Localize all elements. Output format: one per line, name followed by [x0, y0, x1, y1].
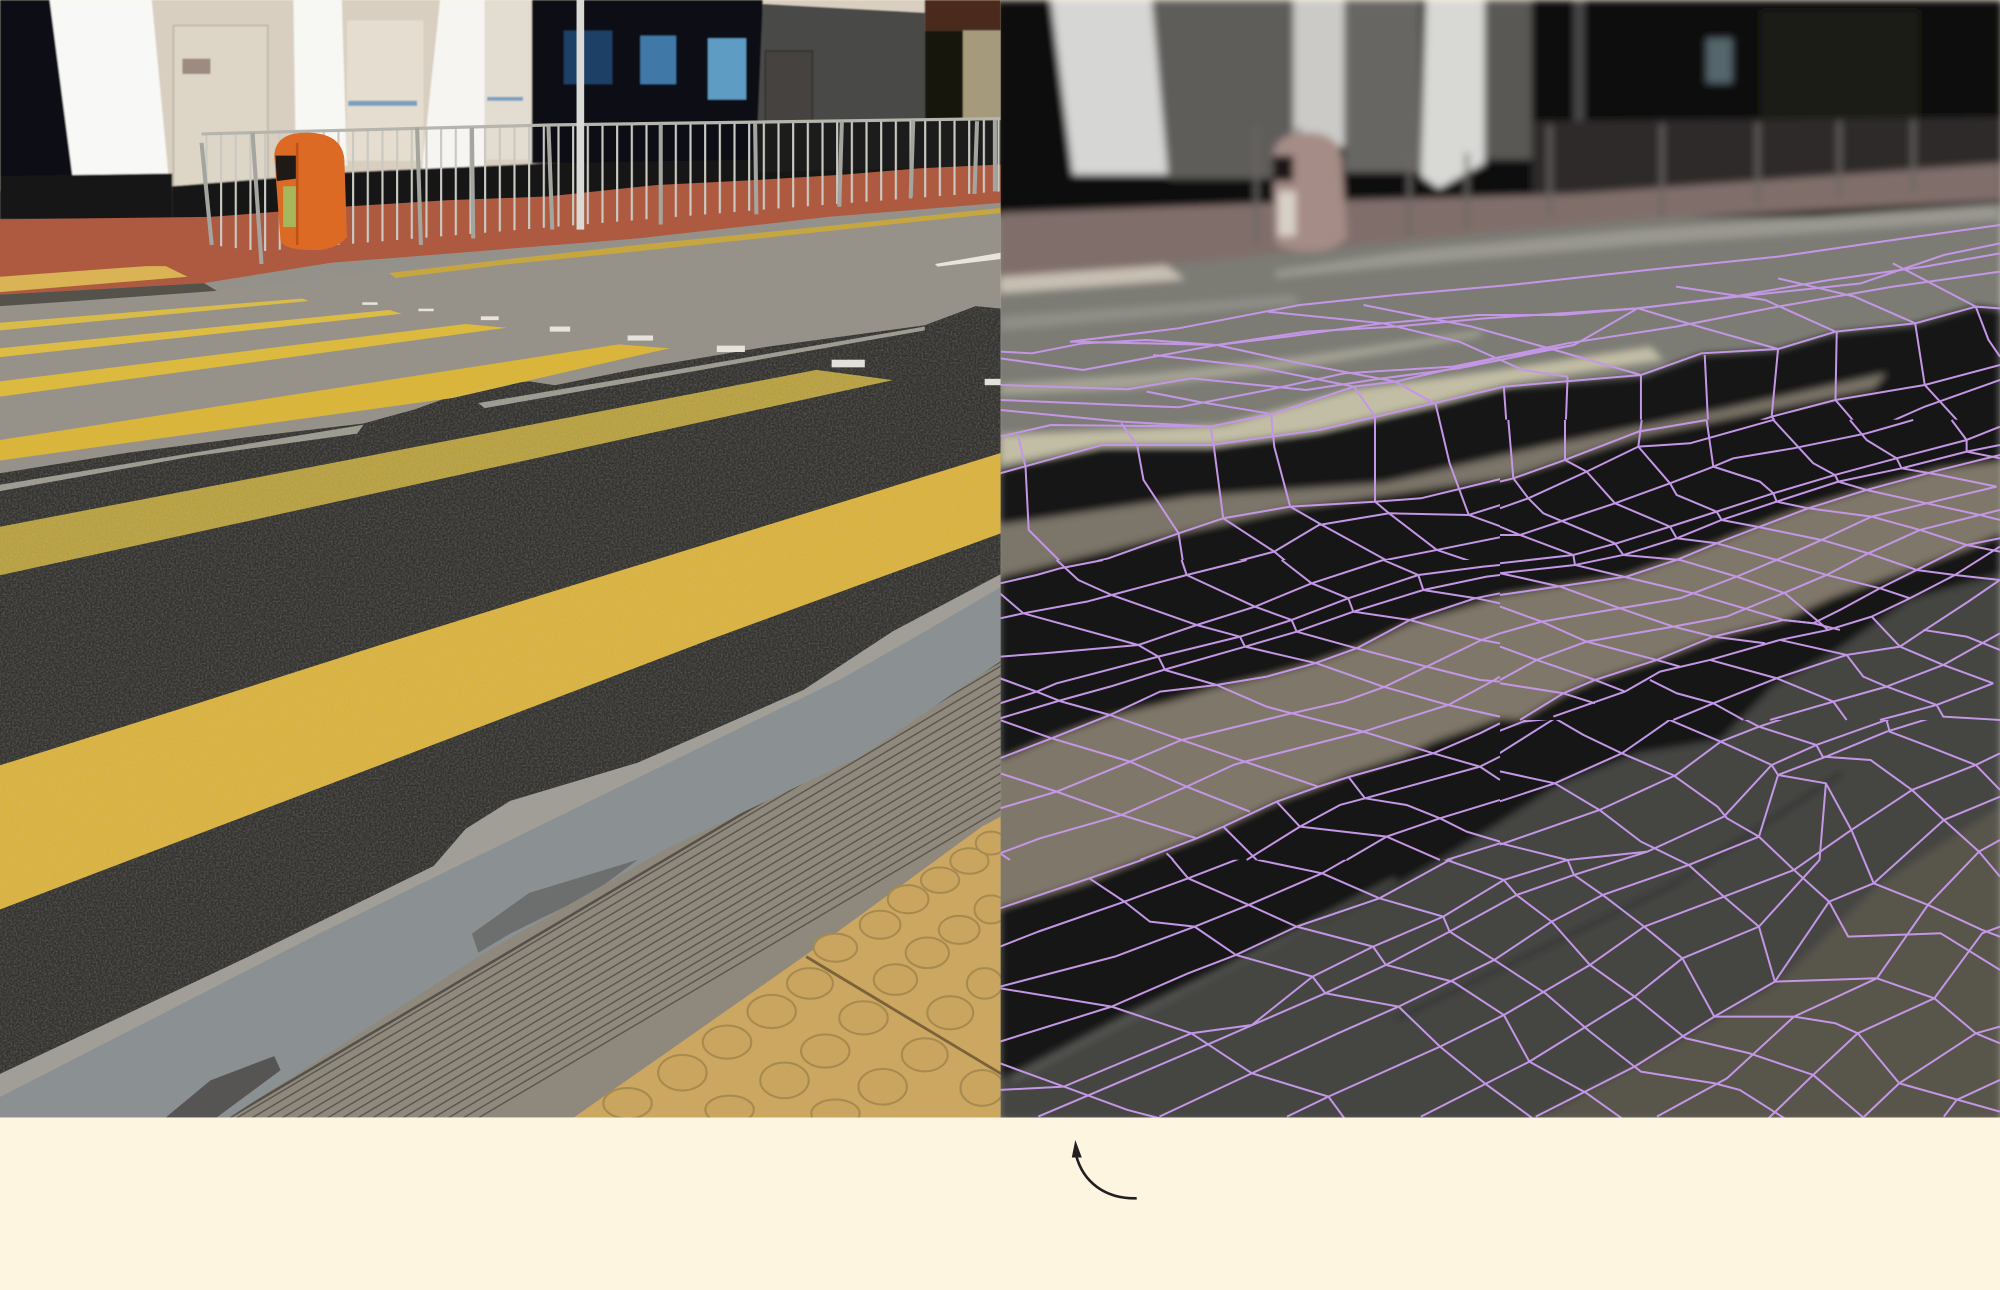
asphalt grain texture [0, 293, 1001, 1084]
blurred scene [995, 0, 2000, 1122]
mesh: traced outer sections [1000, 225, 2000, 1118]
gutter concrete [0, 574, 1001, 1117]
blurred curb highlight [1000, 265, 1185, 293]
mesh: centre-right band section [1500, 420, 2000, 720]
metal fence [202, 119, 1001, 264]
pale gutter lip [0, 574, 1001, 1097]
road paint dashes [362, 302, 1001, 385]
purple deformation mesh [1000, 225, 2000, 1118]
mesh: lower section [1000, 720, 2000, 1118]
blurred sidewalk [1000, 163, 2000, 277]
blurred fence posts [1247, 113, 1922, 204]
blurred road bands [1000, 295, 2000, 1120]
arrow: curved pointer up toward the panels [1072, 1140, 1137, 1198]
tactile paving [574, 816, 1008, 1128]
tactile strip on sidewalk [0, 266, 188, 292]
orange litter bin [274, 133, 347, 250]
panel: blurred view with mesh overlay [995, 0, 2000, 1122]
curb [204, 203, 1001, 291]
mesh: upper and middle section [1000, 224, 2000, 560]
blurred bin [1273, 133, 1347, 251]
mesh: centre-left band section [1000, 560, 1500, 860]
pale light streaks through the shadow [0, 327, 925, 491]
building facade [0, 0, 1001, 219]
sidewalk [0, 165, 1001, 295]
street pole [577, 0, 584, 230]
crossing stripes [0, 298, 1001, 909]
gutter repair patches [472, 860, 638, 953]
road surface [0, 191, 1001, 1117]
brushed concrete strip [230, 661, 1001, 1118]
blurred building [995, 0, 2000, 217]
panel: original street photo [0, 0, 1001, 1118]
shadowed asphalt [0, 306, 1001, 1074]
